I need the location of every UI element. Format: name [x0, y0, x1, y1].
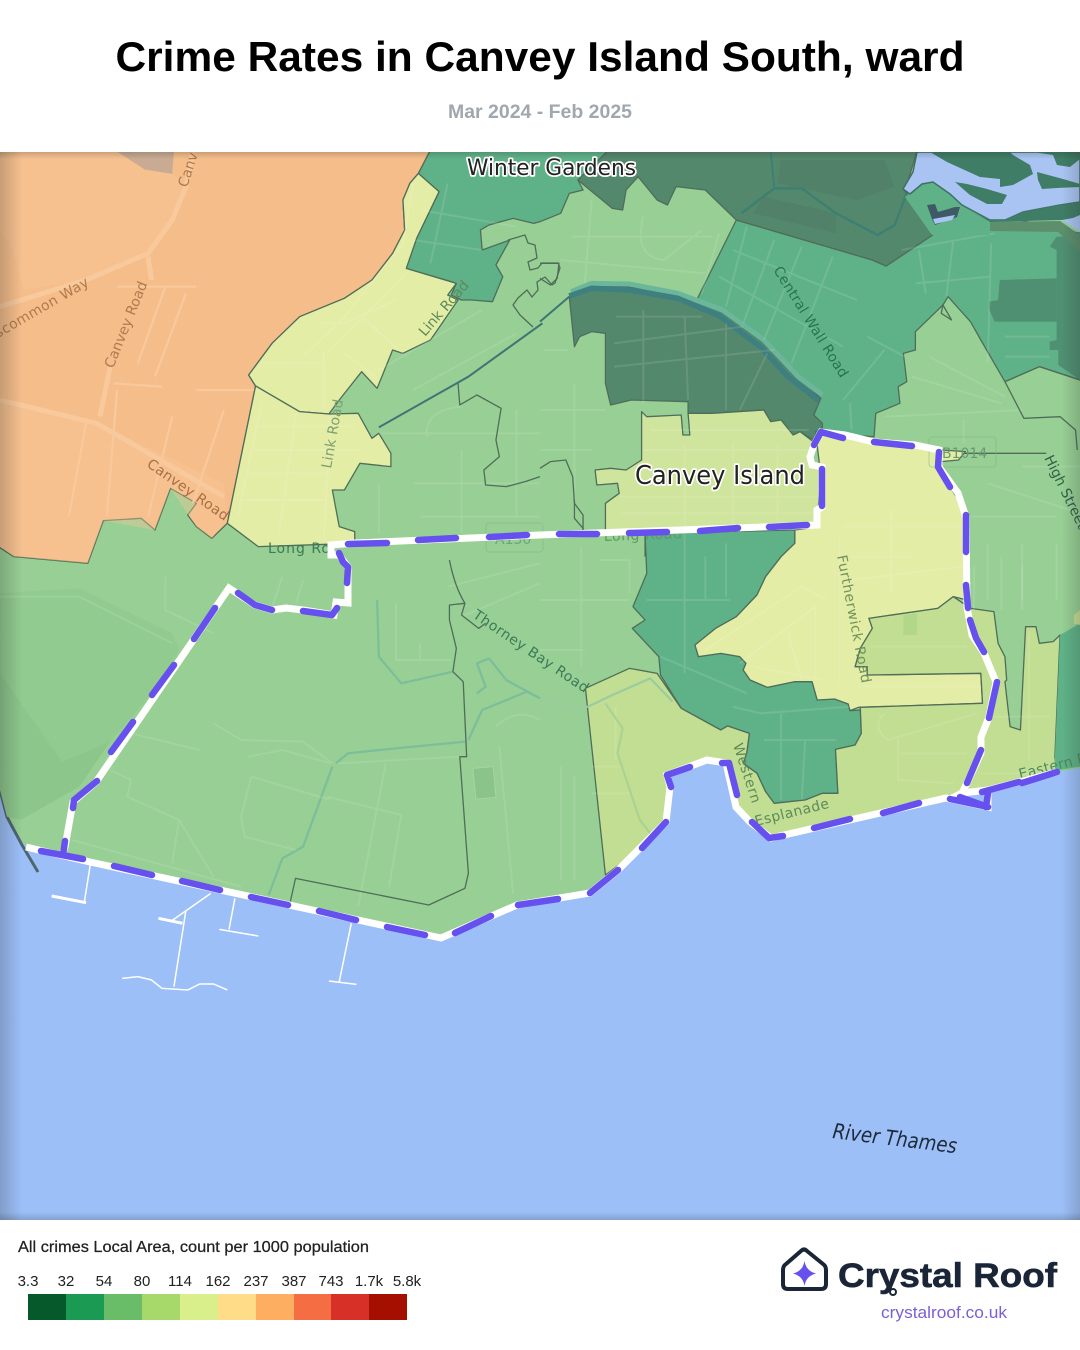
legend title: All crimes Local Area, count per 1000 population	[18, 1239, 369, 1256]
road label: Long Road centre: Long Road	[604, 526, 682, 545]
islands	[930, 152, 1033, 187]
region: orange high crime	[0, 150, 431, 563]
website url: crystalroof.co.uk	[881, 1304, 1008, 1322]
small inlet on peninsula	[927, 204, 960, 225]
canals	[269, 600, 540, 895]
ward boundaries south-west	[290, 560, 486, 905]
playing field	[903, 613, 917, 635]
wordmark key tail	[890, 1289, 896, 1295]
region: pale yellow north	[249, 173, 458, 414]
regions traced from the north-east crop	[540, 150, 1080, 600]
curved river	[569, 288, 819, 401]
green peninsula	[905, 182, 990, 235]
water label: River Thames: River Thames	[831, 1119, 958, 1158]
map edge shading	[0, 152, 1080, 1220]
road label: Link Road south: Link Road	[319, 398, 347, 470]
legend tick values: 743	[318, 1273, 344, 1290]
legend tick values: 1.7k	[355, 1273, 384, 1290]
wordmark: Crystal Roof	[838, 1257, 1058, 1295]
water inlet	[903, 152, 1080, 220]
road shield: A130	[486, 523, 543, 552]
road label: Central Wall Road: Central Wall Road	[770, 264, 851, 381]
legend tick values	[18, 1273, 422, 1290]
legend tick values: 237	[243, 1273, 269, 1290]
region: darker east strips	[989, 278, 1057, 322]
water pocket	[1062, 215, 1080, 232]
logo: Crystal Roof	[783, 1250, 1058, 1322]
legend tick values: 387	[281, 1273, 307, 1290]
legend tick values: 162	[205, 1273, 231, 1290]
orange lighter patches and roads	[4, 488, 216, 564]
canal west of Esplanade	[540, 678, 673, 707]
road label: Esplanade: Esplanade	[753, 796, 831, 830]
road shield: B1014: B1014	[942, 446, 987, 462]
region: green south-centre	[632, 530, 861, 803]
grey patch	[117, 152, 174, 174]
road label: Western: Western	[729, 741, 764, 805]
region: darkest central	[569, 287, 822, 440]
legend colour scale	[28, 1294, 407, 1320]
road label: Link Road north: Link Road	[416, 278, 473, 340]
small yellow B1014 fragment	[941, 450, 965, 462]
road label: Canv top: Canv	[176, 151, 202, 189]
streets north-east	[540, 200, 1080, 600]
ward outline: purple dashes	[41, 432, 1057, 935]
legend tick values: 54	[96, 1273, 112, 1290]
road label: Canvey Road north: Canvey Road	[102, 279, 151, 370]
boundaries of the central-north blocks	[508, 235, 560, 327]
choropleth map	[0, 150, 1080, 1220]
road label: Thorney Bay Road: Thorney Bay Road	[469, 606, 591, 696]
streets south-west	[0, 563, 540, 907]
details traced from the south-west crop	[0, 560, 540, 990]
legend tick values: 3.3	[18, 1273, 38, 1290]
top creek	[741, 188, 907, 235]
ward boundaries west	[458, 383, 540, 487]
road label: Canvey Road south: Canvey Road	[144, 456, 232, 524]
region: dark green east edge	[1055, 623, 1080, 771]
darker shore strip	[990, 221, 1080, 252]
sea defences and jetties	[52, 865, 356, 990]
region: light green south and west	[585, 597, 1060, 875]
road shield: A130: A130	[495, 532, 531, 548]
title: Crime Rates in Canvey Island South, ward	[116, 33, 964, 80]
darker marsh shading	[0, 588, 179, 762]
legend	[18, 1239, 422, 1320]
road shield: B1014	[929, 437, 996, 467]
pale streets north-west	[238, 183, 540, 540]
icon: house with star	[783, 1250, 826, 1289]
place label: Canvey Island: Canvey Island	[635, 461, 805, 491]
region: pale yellow ward centre	[695, 432, 983, 711]
recreation ground	[473, 767, 496, 799]
estuary north-east corner	[903, 152, 1080, 252]
legend tick values: 80	[134, 1273, 150, 1290]
legend tick values: 114	[168, 1273, 192, 1290]
regions traced from the south-east crop	[540, 432, 1080, 880]
ward boundaries north-east	[540, 263, 1080, 530]
legend tick values: 32	[58, 1273, 74, 1290]
region: darkest top	[578, 150, 933, 266]
ward outline: white base	[26, 432, 1057, 938]
river halo	[571, 283, 822, 395]
region: pale yellow Link Road	[227, 386, 391, 547]
southern shore	[962, 202, 1080, 222]
place label: Winter Gardens: Winter Gardens	[467, 156, 636, 181]
road label: Furtherwick Road: Furtherwick Road	[833, 554, 874, 684]
streets south-east	[540, 510, 1050, 880]
regions traced from the north-west crop	[0, 150, 609, 563]
region: green east	[697, 200, 1080, 437]
road label: Long Road west: Long Ro	[268, 541, 330, 557]
legend tick values: 5.8k	[393, 1273, 422, 1290]
ward boundaries south	[574, 500, 645, 557]
region: green Winter Gardens	[406, 150, 609, 302]
land base	[0, 152, 1080, 938]
dark shoreline	[0, 790, 38, 872]
water: River Thames	[0, 764, 1080, 1220]
date range subtitle: Mar 2024 - Feb 2025	[448, 102, 632, 123]
dark river line north-west	[379, 323, 542, 427]
region: pale green Canvey Island block	[595, 410, 821, 532]
